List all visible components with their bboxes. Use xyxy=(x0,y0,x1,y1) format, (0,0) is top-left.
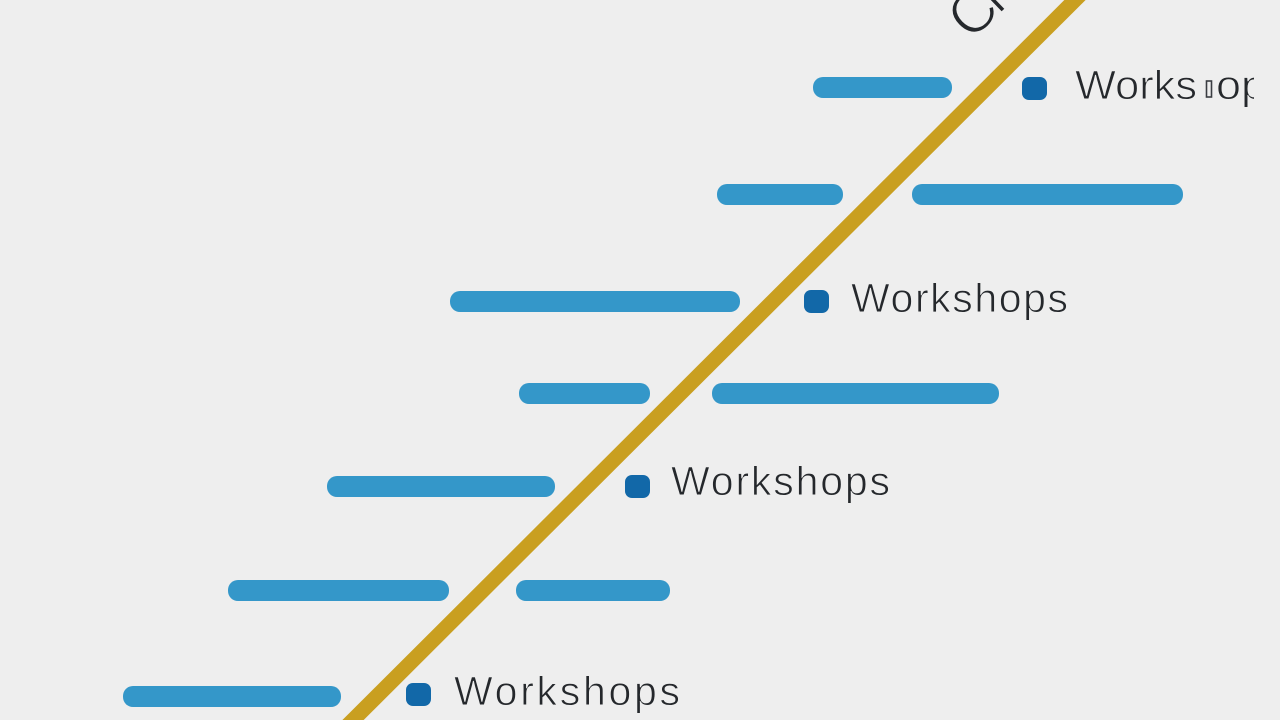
bar row 7 left xyxy=(123,686,341,707)
bar row 5 left xyxy=(327,476,555,497)
bar row 4 left xyxy=(519,383,650,404)
workshop label: row 3: Workshops xyxy=(851,275,1068,321)
bar row 2 right xyxy=(912,184,1183,205)
marker xyxy=(804,290,829,313)
marker xyxy=(625,475,650,498)
bar row 2 left xyxy=(717,184,843,205)
bar row 4 right xyxy=(712,383,999,404)
workshop label: row 5: Workshops xyxy=(671,458,890,504)
marker xyxy=(406,683,431,706)
bar row 3 left xyxy=(450,291,740,312)
diagonal gold timeline xyxy=(342,0,1086,720)
workshop label: top, distorted xyxy=(1022,70,1254,107)
workshop label: bottom: Workshops xyxy=(454,668,680,714)
marker xyxy=(1022,77,1047,100)
workshop label: top, distorted: Works xyxy=(1075,62,1197,108)
bar row 6 right xyxy=(516,580,670,601)
blue timeline bars xyxy=(123,77,1183,707)
workshop label: top, distorted: op xyxy=(1216,62,1266,108)
bar row 6 left xyxy=(228,580,449,601)
bar row 1 left xyxy=(813,77,952,98)
